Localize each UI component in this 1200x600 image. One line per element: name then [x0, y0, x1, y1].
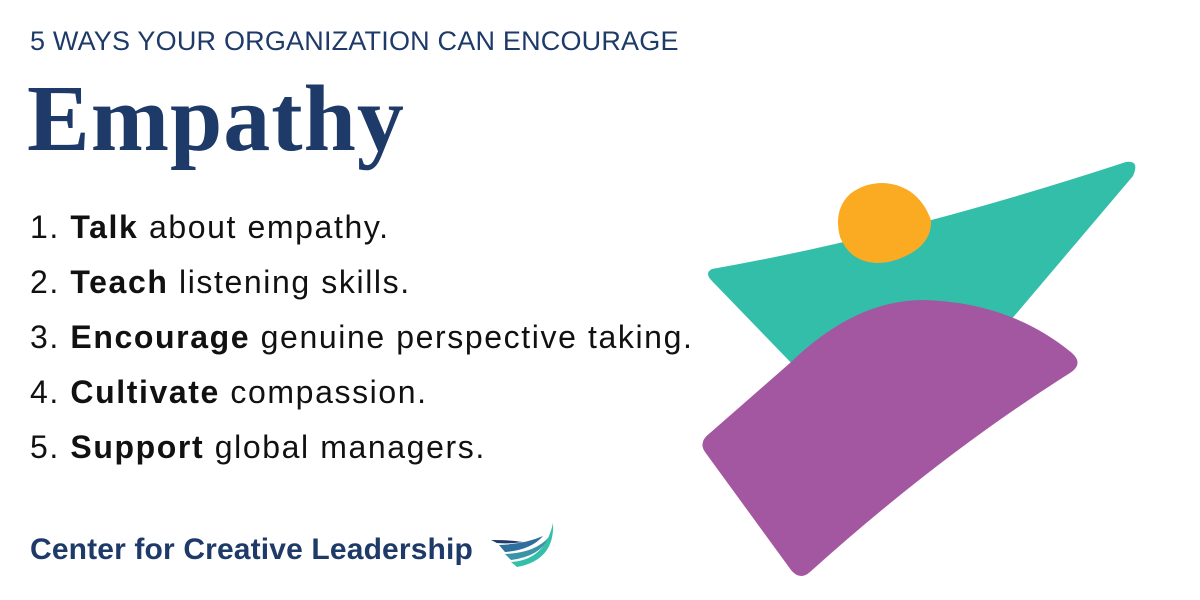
subtitle: 5 WAYS YOUR ORGANIZATION CAN ENCOURAGE	[30, 26, 679, 56]
shape: purple	[702, 300, 1078, 576]
shape: orange	[838, 183, 931, 263]
logo: Center for Creative Leadership	[30, 533, 473, 566]
list of ways: 1. Talk about empathy.	[30, 209, 390, 245]
title: Empathy	[27, 67, 405, 171]
list of ways: 3. Encourage genuine perspective taking.	[30, 319, 693, 355]
list of ways	[30, 209, 693, 465]
shape: teal	[708, 162, 1135, 380]
list of ways: 5. Support global managers.	[30, 429, 486, 465]
list of ways: 4. Cultivate compassion.	[30, 374, 428, 410]
list of ways: 2. Teach listening skills.	[30, 264, 411, 300]
logo	[30, 523, 554, 567]
